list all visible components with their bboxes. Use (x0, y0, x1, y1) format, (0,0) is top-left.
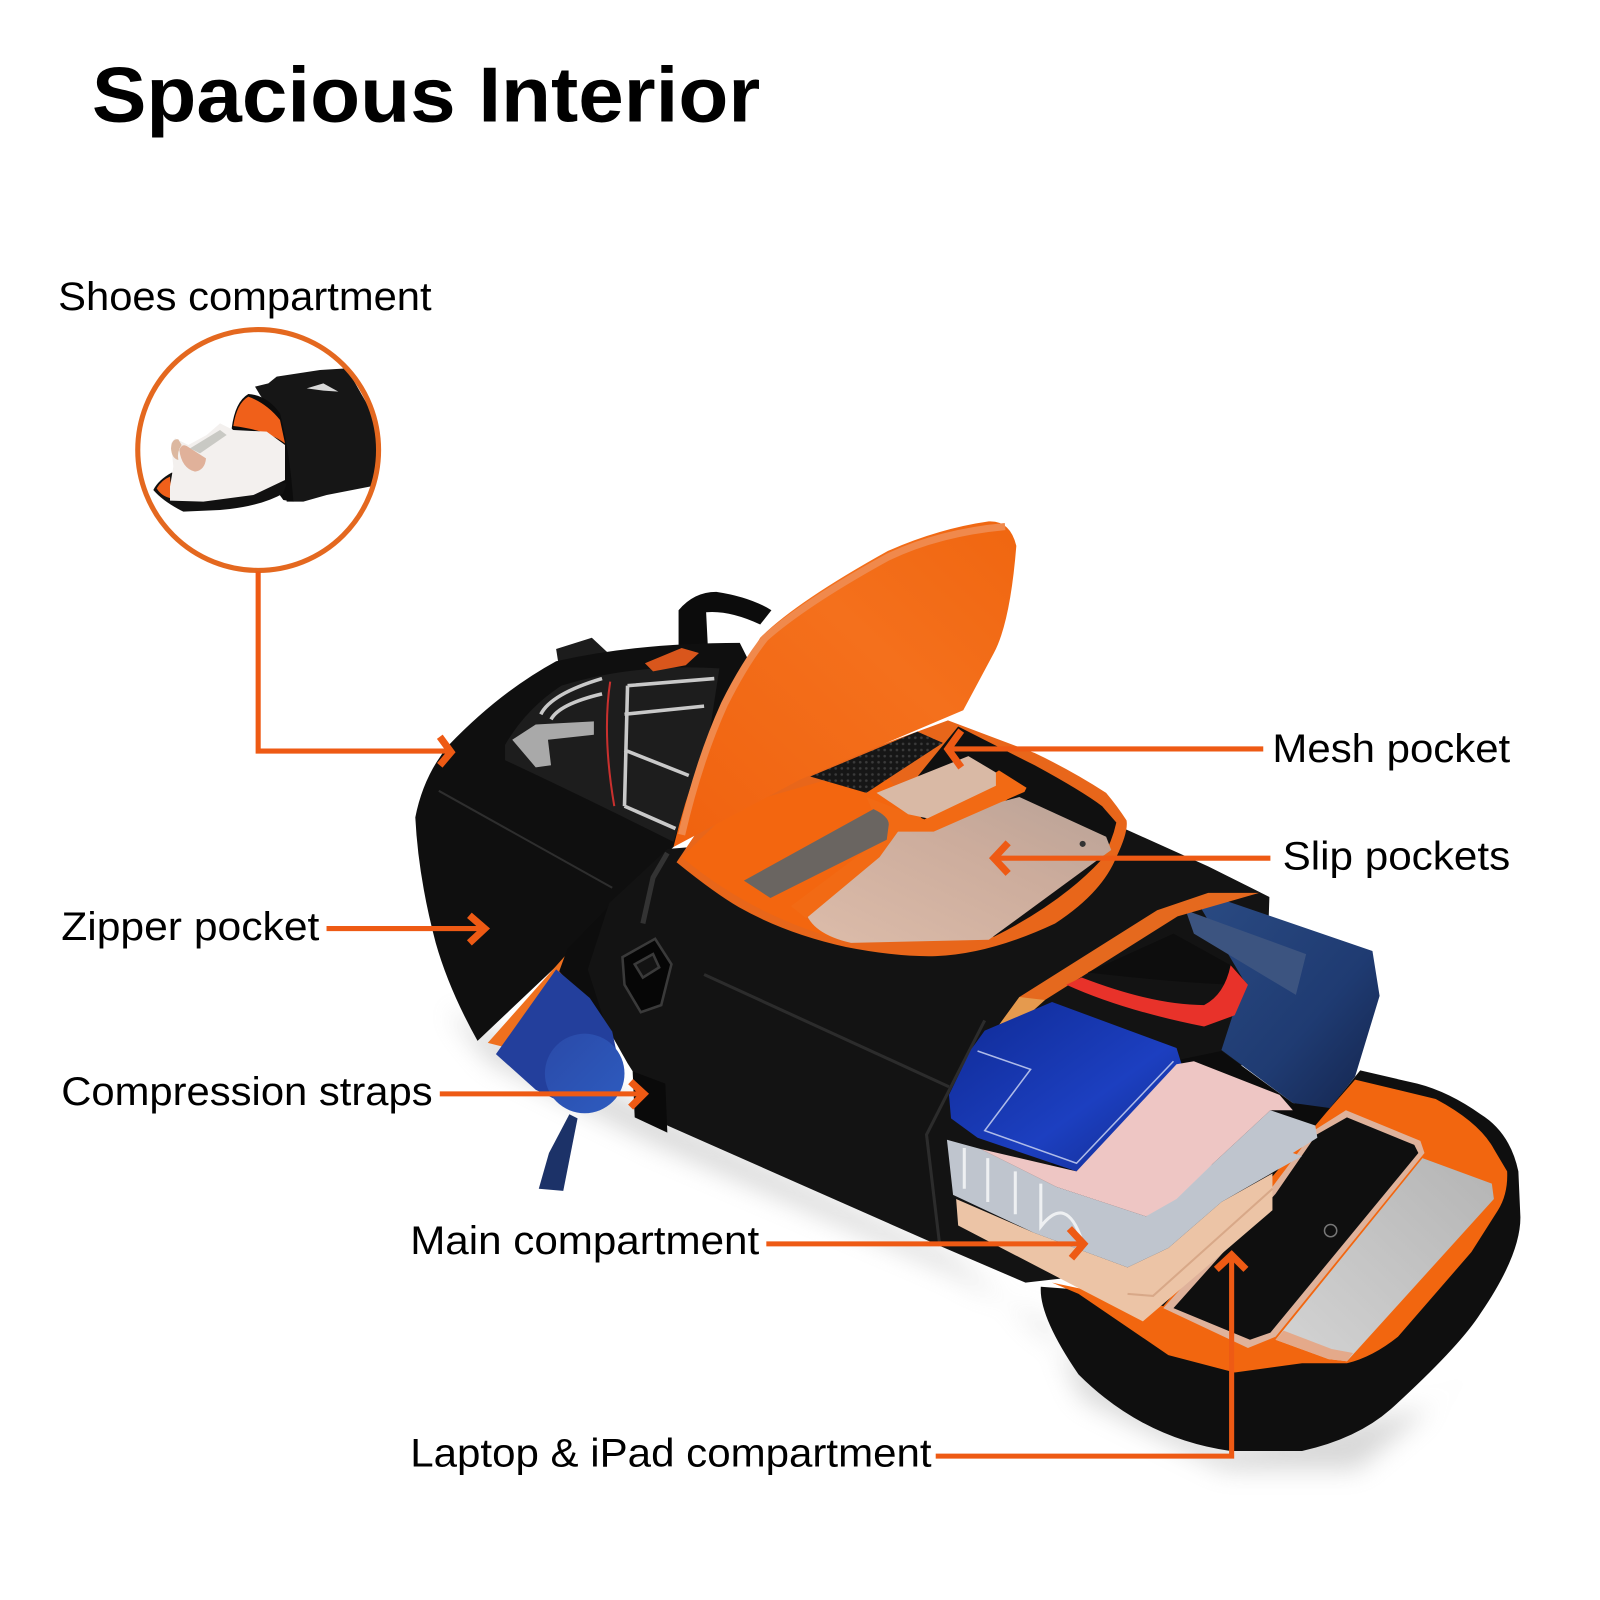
pink power bank (877, 756, 996, 818)
label: laptop and iPad compartment: Laptop & iPad compartment (410, 1431, 932, 1475)
callout: mesh pocket arrow (948, 731, 1263, 767)
lid orange lining (1052, 1080, 1507, 1372)
label: main compartment: Main compartment (410, 1219, 759, 1263)
backpack illustration (415, 521, 1380, 1283)
gray case (744, 809, 889, 898)
jeans (1186, 900, 1380, 1110)
round lid (1041, 1070, 1520, 1451)
callout: main compartment arrow (766, 1229, 1084, 1258)
rose tablet (805, 797, 1111, 943)
rear body (415, 643, 776, 1041)
blue notebook (949, 1002, 1182, 1171)
inset: bag print (307, 383, 338, 392)
main body with opening (588, 830, 1269, 1283)
book (956, 1173, 1272, 1321)
rim highlight patch (995, 997, 1045, 1036)
red case (1047, 934, 1248, 1027)
top handle (679, 592, 771, 673)
lid outer (1041, 1070, 1520, 1451)
inset: lid (153, 473, 287, 512)
title: Spacious Interior (92, 52, 760, 138)
organizer sheet (682, 765, 1024, 943)
organizer divider (791, 770, 1027, 918)
main compartment rim (995, 893, 1259, 1036)
label: slip pockets: Slip pockets (1283, 834, 1510, 878)
book pages edge (1128, 1189, 1272, 1296)
compression strap (633, 1071, 667, 1133)
shirt lettering (964, 1148, 1082, 1240)
tablet (1163, 1110, 1424, 1348)
raised orange flap (673, 521, 1016, 847)
umbrella pocket shadow fill (559, 903, 616, 1036)
label: zipper pocket: Zipper pocket (61, 905, 319, 949)
inset: bag body (255, 368, 387, 502)
callout: shoes compartment leader (258, 571, 451, 765)
callout: laptop compartment arrow (936, 1255, 1246, 1456)
umbrella (496, 969, 624, 1191)
folded shirt (947, 1110, 1317, 1267)
inset: bag opening (232, 394, 293, 502)
mesh pocket (810, 732, 943, 793)
laptop (1276, 1158, 1494, 1361)
folded stack (947, 1061, 1317, 1321)
umbrella pocket zipper edge (488, 951, 578, 1047)
soft ground shadow (449, 1010, 1490, 1469)
zipper pull (643, 853, 667, 923)
upper compartment rim (677, 720, 1127, 956)
label: shoes compartment: Shoes compartment (58, 275, 432, 319)
inset: orange interior (233, 397, 285, 443)
callout: zipper pocket arrow (327, 915, 485, 943)
callout: compression straps arrow (440, 1082, 644, 1107)
D-ring strap (556, 638, 608, 676)
callout: slip pockets arrow (994, 843, 1270, 873)
label: mesh pocket: Mesh pocket (1272, 727, 1510, 771)
dark interior behind contents (1020, 1051, 1346, 1276)
inset circle: shoes compartment photo (138, 330, 387, 570)
print panel (505, 648, 719, 842)
rear seam (439, 791, 612, 888)
upper interior dark (867, 727, 1116, 937)
buckle (622, 939, 671, 1012)
label: compression straps: Compression straps (61, 1070, 433, 1114)
folded pink cloth (981, 1061, 1293, 1216)
inset: white shoes (170, 423, 285, 502)
body seam (704, 974, 985, 1246)
